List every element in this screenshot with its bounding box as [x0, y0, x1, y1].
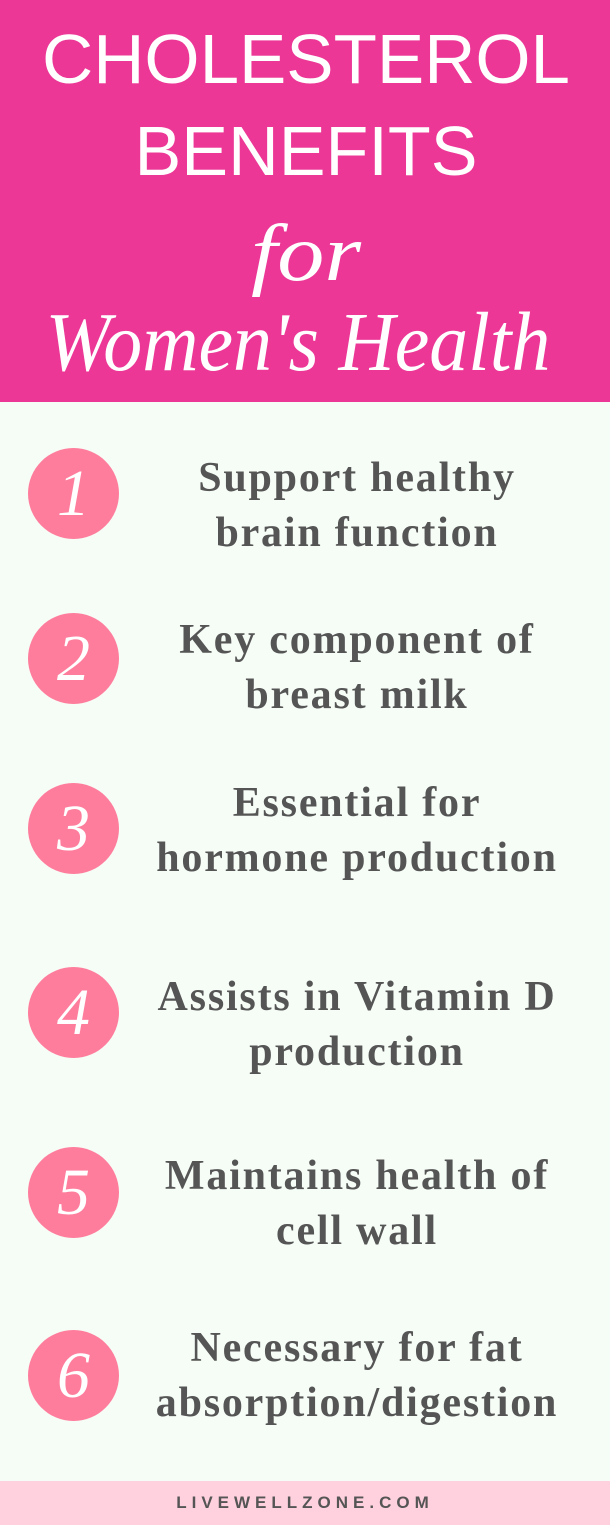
- text: item 2: breast milk: [245, 672, 469, 718]
- icon: number 5: [28, 1147, 119, 1238]
- icon: number 6: 6: [57, 1339, 90, 1412]
- text: item 6: absorption/digestion: [156, 1380, 558, 1426]
- text: item 3: [156, 780, 558, 881]
- text: item 1: Support healthy: [198, 455, 516, 501]
- title: BENEFITS: [134, 112, 478, 190]
- footer: [0, 1481, 610, 1525]
- header banner: [0, 0, 610, 402]
- text: item 5: [165, 1153, 549, 1254]
- text: item 5: Maintains health of: [165, 1153, 549, 1199]
- title: CHOLESTEROL: [42, 20, 570, 98]
- icon: number 5: 5: [57, 1156, 90, 1229]
- text: item 1: brain function: [215, 510, 499, 556]
- title: Women's Health: [46, 296, 550, 389]
- text: item 2: [179, 617, 535, 718]
- text: item 4: [158, 974, 556, 1075]
- icon: number 1: 1: [57, 457, 90, 530]
- icon: number 3: [28, 783, 119, 874]
- footer: LIVEWELLZONE.COM: [176, 1493, 434, 1512]
- text: item 1: [198, 455, 516, 556]
- text: item 3: Essential for: [233, 780, 481, 826]
- text: item 5: cell wall: [276, 1208, 438, 1254]
- icon: number 1: [28, 448, 119, 539]
- icon: number 3: 3: [57, 792, 90, 865]
- text: item 2: Key component of: [179, 617, 535, 663]
- text: item 4: production: [249, 1029, 465, 1075]
- text: item 4: Assists in Vitamin D: [158, 974, 556, 1020]
- title: [42, 20, 570, 389]
- icon: number 6: [28, 1330, 119, 1421]
- text: item 6: Necessary for fat: [190, 1325, 524, 1371]
- text: item 3: hormone production: [156, 835, 558, 881]
- icon: number 2: [28, 613, 119, 704]
- text: item 6: [156, 1325, 558, 1426]
- title: for: [251, 210, 362, 298]
- icon: number 2: 2: [57, 622, 90, 695]
- icon: number 4: 4: [57, 976, 90, 1049]
- icon: number 4: [28, 967, 119, 1058]
